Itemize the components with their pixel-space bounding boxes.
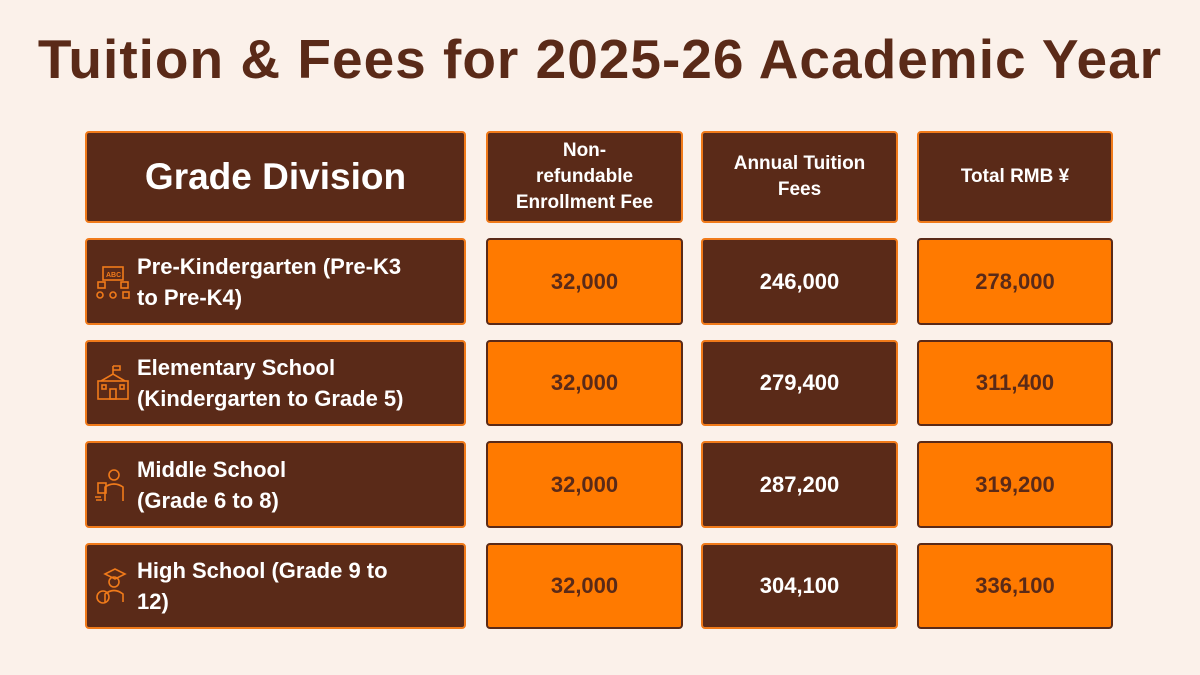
row: pre-k (85, 238, 466, 325)
row: elementary: Elementary School (137, 355, 335, 380)
header: enrollment fee (486, 131, 683, 223)
header: grade division (85, 131, 466, 223)
text: 32,000 (551, 573, 618, 598)
header: enrollment fee: refundable (536, 166, 633, 187)
row: elementary (85, 340, 466, 426)
text: 246,000 (760, 268, 839, 294)
text: 319,200 (975, 472, 1055, 496)
row: elementary: (Kindergarten to Grade 5) (137, 386, 403, 411)
title: Tuition & Fees for 2025-26 Academic Year (38, 28, 1162, 90)
row: middle (85, 441, 466, 528)
header: enrollment fee: Enrollment Fee (516, 192, 653, 213)
row: high: High School (Grade 9 to (137, 558, 388, 583)
text: 336,100 (975, 573, 1055, 598)
header: enrollment fee: Non- (563, 140, 606, 161)
text: 279,400 (760, 370, 839, 395)
text: 304,100 (760, 573, 839, 598)
row: middle: Middle School (137, 456, 286, 482)
text: 32,000 (551, 268, 618, 294)
text: 278,000 (975, 268, 1055, 294)
table (85, 131, 1113, 629)
text: 32,000 (551, 370, 618, 395)
row: pre-k: Pre-Kindergarten (Pre-K3 (137, 254, 401, 278)
header: grade division: Grade Division (145, 156, 406, 197)
row: pre-k: to Pre-K4) (137, 284, 242, 310)
header: annual tuition: Fees (778, 179, 821, 200)
text: 32,000 (551, 472, 618, 496)
row: pre-k: ABC (106, 272, 121, 278)
header: annual tuition (701, 131, 898, 223)
header: annual tuition: Annual Tuition (734, 153, 865, 174)
header: total (917, 131, 1113, 223)
row: high: 12) (137, 589, 169, 614)
row: middle: (Grade 6 to 8) (137, 488, 279, 512)
text: 311,400 (976, 370, 1054, 395)
row: high (85, 543, 466, 629)
text: 287,200 (760, 472, 839, 496)
header: total: Total RMB ¥ (961, 166, 1069, 187)
